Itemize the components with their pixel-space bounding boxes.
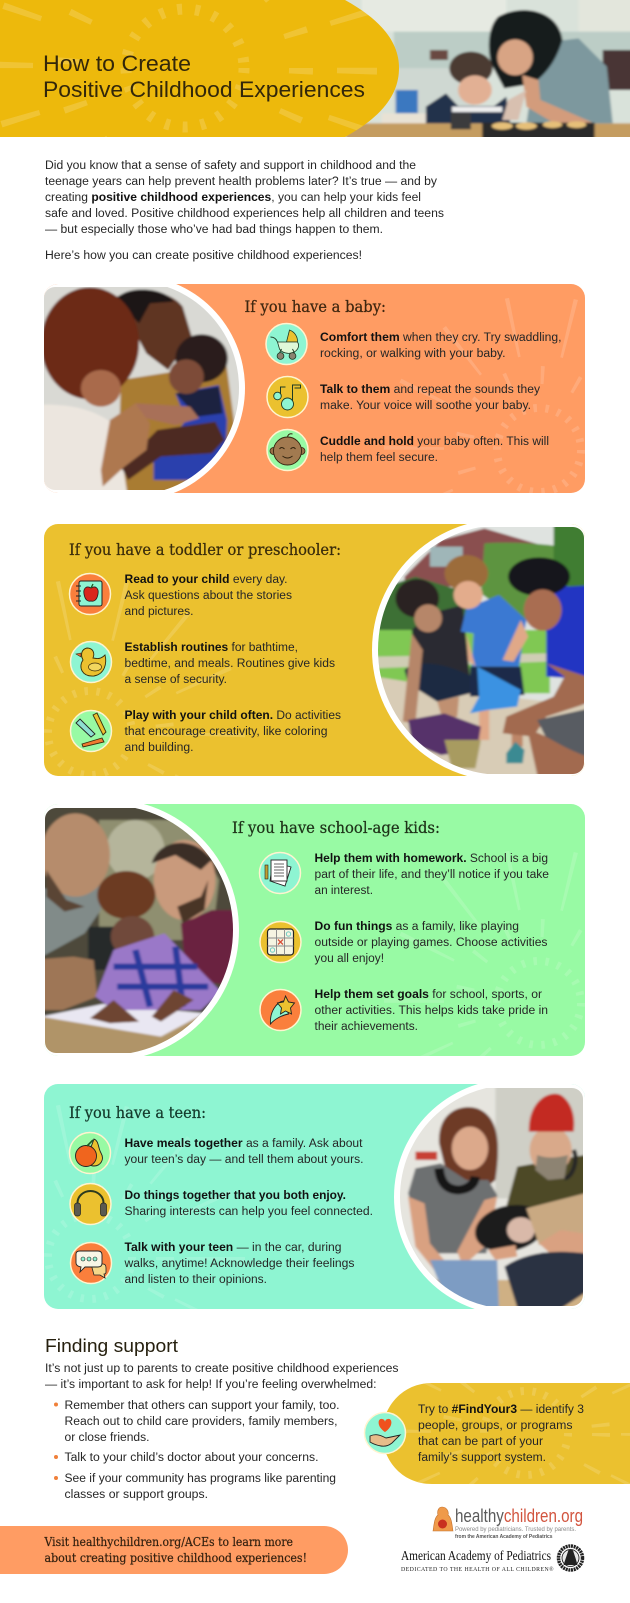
- logo: healthychildren.org: healthychildren.org: [455, 1505, 583, 1526]
- text block: help set goals: Help them set goals for school, sports, or: [314, 989, 542, 1001]
- icon: stroller: [266, 324, 307, 364]
- text block: help with homework: Help them with homework. School is a big: [314, 853, 548, 865]
- icon: homework papers: [260, 852, 300, 894]
- callout text: family’s support system.: [418, 1452, 546, 1464]
- bullet list: classes or support groups.: [64, 1489, 208, 1501]
- logo: healthychildren.org: [433, 1505, 583, 1540]
- bullet list: Talk to your child’s doctor about your concerns.: [64, 1452, 318, 1464]
- photo: parents with baby: [44, 287, 239, 490]
- text block: do things together: Do things together that you both enjoy.: [124, 1190, 346, 1202]
- photo: teen and father with vinyl record: [400, 1088, 583, 1306]
- logo: american academy of pediatrics: [401, 1546, 582, 1573]
- panel: if you have a toddler or preschooler: [44, 524, 585, 776]
- text block: help with homework: [314, 853, 549, 897]
- text block: help set goals: [314, 989, 548, 1033]
- text block: comfort them: rocking, or walking with your baby.: [320, 348, 506, 360]
- text block: play with your child: that encourage creativity, like coloring: [124, 726, 328, 738]
- logo: healthychildren.org: from the American Academy of Pediatrics: [455, 1534, 552, 1540]
- banner: visit healthychildren.org: [0, 1526, 348, 1574]
- text block: play with your child: [124, 710, 341, 754]
- text block: read to your child: Ask questions about the stories: [124, 590, 292, 602]
- logo: healthychildren.org: Powered by pediatricians. Trusted by parents.: [455, 1526, 576, 1533]
- yellow card background: [44, 524, 585, 776]
- text block: cuddle and hold: Cuddle and hold your baby often. This will: [320, 436, 549, 448]
- text block: read to your child: and pictures.: [124, 606, 194, 618]
- bullet list: See if your community has programs like parenting: [64, 1473, 336, 1485]
- text block: talk with your teen: and listen to their opinions.: [124, 1274, 267, 1286]
- text block: cuddle and hold: help them feel secure.: [320, 452, 438, 464]
- text block: establish routines: bedtime, and meals. Routines give kids: [124, 658, 335, 670]
- panel: if you have school-age kids: [44, 804, 585, 1056]
- callout: find your 3: [364, 1383, 630, 1484]
- text block: talk with your teen: [123, 1242, 355, 1286]
- icon: rubber duck: [70, 642, 112, 682]
- text block: help with homework: part of their life, and they’ll notice if you take: [314, 869, 549, 881]
- text block: have meals together: Have meals together as a family. Ask about: [124, 1138, 363, 1150]
- green card background: [44, 804, 585, 1056]
- text block: help set goals: their achievements.: [314, 1021, 418, 1033]
- text block: read to your child: Read to your child every day.: [124, 574, 288, 586]
- text block: establish routines: Establish routines for bathtime,: [124, 642, 298, 654]
- icon: AAP seal: [558, 1546, 582, 1570]
- text block: establish routines: a sense of security.: [124, 674, 227, 686]
- text block: talk with your teen: walks, anytime! Acknowledge their feelings: [123, 1258, 355, 1270]
- callout text: people, groups, or programs: [418, 1420, 573, 1432]
- panel: if you have a baby: [44, 284, 585, 493]
- text block: do fun things: Do fun things as a family, like playing: [314, 921, 519, 933]
- photo: family gardening: [378, 527, 584, 774]
- text block: talk to them: Talk to them and repeat the sounds they: [320, 384, 540, 396]
- intro text: teenage years can help prevent health problems later? It’s true — and by: [45, 176, 437, 188]
- intro text: — but especially those who’ve had bad things happen to them.: [45, 224, 383, 236]
- logo: american academy of pediatrics: American Academy of Pediatrics: [401, 1548, 551, 1563]
- icon: music notes: [267, 376, 308, 418]
- callout text: that can be part of your: [418, 1436, 543, 1448]
- text block: do things together: [124, 1190, 373, 1218]
- panel: if you have a teen: [44, 1084, 585, 1309]
- section: finding support: [45, 1335, 399, 1501]
- text block: help set goals: other activities. This helps kids take pride in: [314, 1005, 548, 1017]
- intro text: [45, 160, 444, 262]
- icon: fruit: [70, 1132, 110, 1174]
- text block: intro: [45, 1363, 399, 1391]
- text block: do things together: Sharing interests can help you feel connected.: [124, 1206, 373, 1218]
- hero banner: [0, 0, 630, 137]
- text block: talk to them: make. Your voice will soothe your baby.: [320, 400, 531, 412]
- icon: chat bubbles: [70, 1242, 112, 1284]
- intro text: Here’s how you can create positive childhood experiences!: [45, 250, 362, 262]
- intro text: creating positive childhood experiences , you can help your kids feel: [45, 192, 421, 204]
- text block: have meals together: [124, 1138, 364, 1166]
- banner text: about creating positive childhood experiences!: [44, 1551, 307, 1565]
- text block: intro: It’s not just up to parents to create positive childhood experiences: [45, 1363, 399, 1375]
- heading: If you have a teen:: [69, 1104, 206, 1122]
- icon: book with apple: [70, 574, 110, 614]
- heading: Finding support: [45, 1335, 178, 1356]
- text block: help with homework: an interest.: [314, 885, 373, 897]
- hero photo: parent and child baking: [345, 0, 630, 137]
- heading: If you have a toddler or preschooler:: [69, 541, 341, 559]
- title: Positive Childhood Experiences: [43, 77, 365, 102]
- orange pill: [0, 1526, 348, 1574]
- icon: family figure: [433, 1507, 453, 1531]
- yellow pill: [382, 1383, 630, 1484]
- text block: talk with your teen: Talk with your teen — in the car, during: [124, 1242, 342, 1254]
- text block: play with your child: and building.: [124, 742, 194, 754]
- teal card background: [44, 1084, 585, 1309]
- title: How to Create: [43, 51, 191, 76]
- text block: talk to them: [320, 384, 540, 412]
- yellow title shape: [0, 0, 399, 137]
- text block: cuddle and hold: [320, 436, 549, 464]
- icon: baby face: [267, 430, 308, 470]
- title: [43, 51, 365, 102]
- text block: intro: — it’s important to ask for help! If you’re feeling overwhelmed:: [45, 1379, 376, 1391]
- text block: comfort them: [320, 332, 562, 360]
- text block: comfort them: Comfort them when they cry. Try swaddling,: [320, 332, 562, 344]
- intro text: safe and loved. Positive childhood experiences help all children and teens: [45, 208, 444, 220]
- text block: play with your child: Play with your child often. Do activities: [124, 710, 341, 722]
- bullet list: or close friends.: [64, 1432, 150, 1444]
- callout text: Try to #FindYour3 — identify 3: [418, 1404, 584, 1416]
- heading: If you have school-age kids:: [232, 819, 440, 837]
- photo: fathers helping child with homework: [45, 808, 233, 1053]
- logo: american academy of pediatrics: DEDICATED TO THE HEALTH OF ALL CHILDREN®: [401, 1566, 554, 1573]
- bullet list: Remember that others can support your family, too.: [64, 1400, 340, 1412]
- heading: If you have a baby:: [244, 298, 386, 316]
- callout text: [418, 1404, 584, 1464]
- icon: shooting star: [260, 990, 301, 1030]
- icon: headphones: [70, 1184, 111, 1224]
- text block: do fun things: [314, 921, 548, 965]
- icon: heart in hand: [364, 1412, 406, 1454]
- banner text: Visit healthychildren.org/ACEs to learn more: [44, 1535, 293, 1549]
- text block: have meals together: your teen’s day — and tell them about yours.: [124, 1154, 364, 1166]
- icon: crayons: [70, 710, 112, 752]
- banner text: [44, 1535, 307, 1565]
- text block: do fun things: you all enjoy!: [314, 953, 384, 965]
- orange card background: [44, 284, 585, 493]
- intro text: Did you know that a sense of safety and support in childhood and the: [45, 160, 416, 172]
- text block: do fun things: outside or playing games. Choose activities: [314, 937, 548, 949]
- text block: read to your child: [124, 574, 292, 618]
- bullet list: Reach out to child care providers, family members,: [64, 1416, 338, 1428]
- bullet list: [54, 1400, 340, 1501]
- icon: tic-tac-toe: [260, 922, 301, 962]
- text block: establish routines: [124, 642, 335, 686]
